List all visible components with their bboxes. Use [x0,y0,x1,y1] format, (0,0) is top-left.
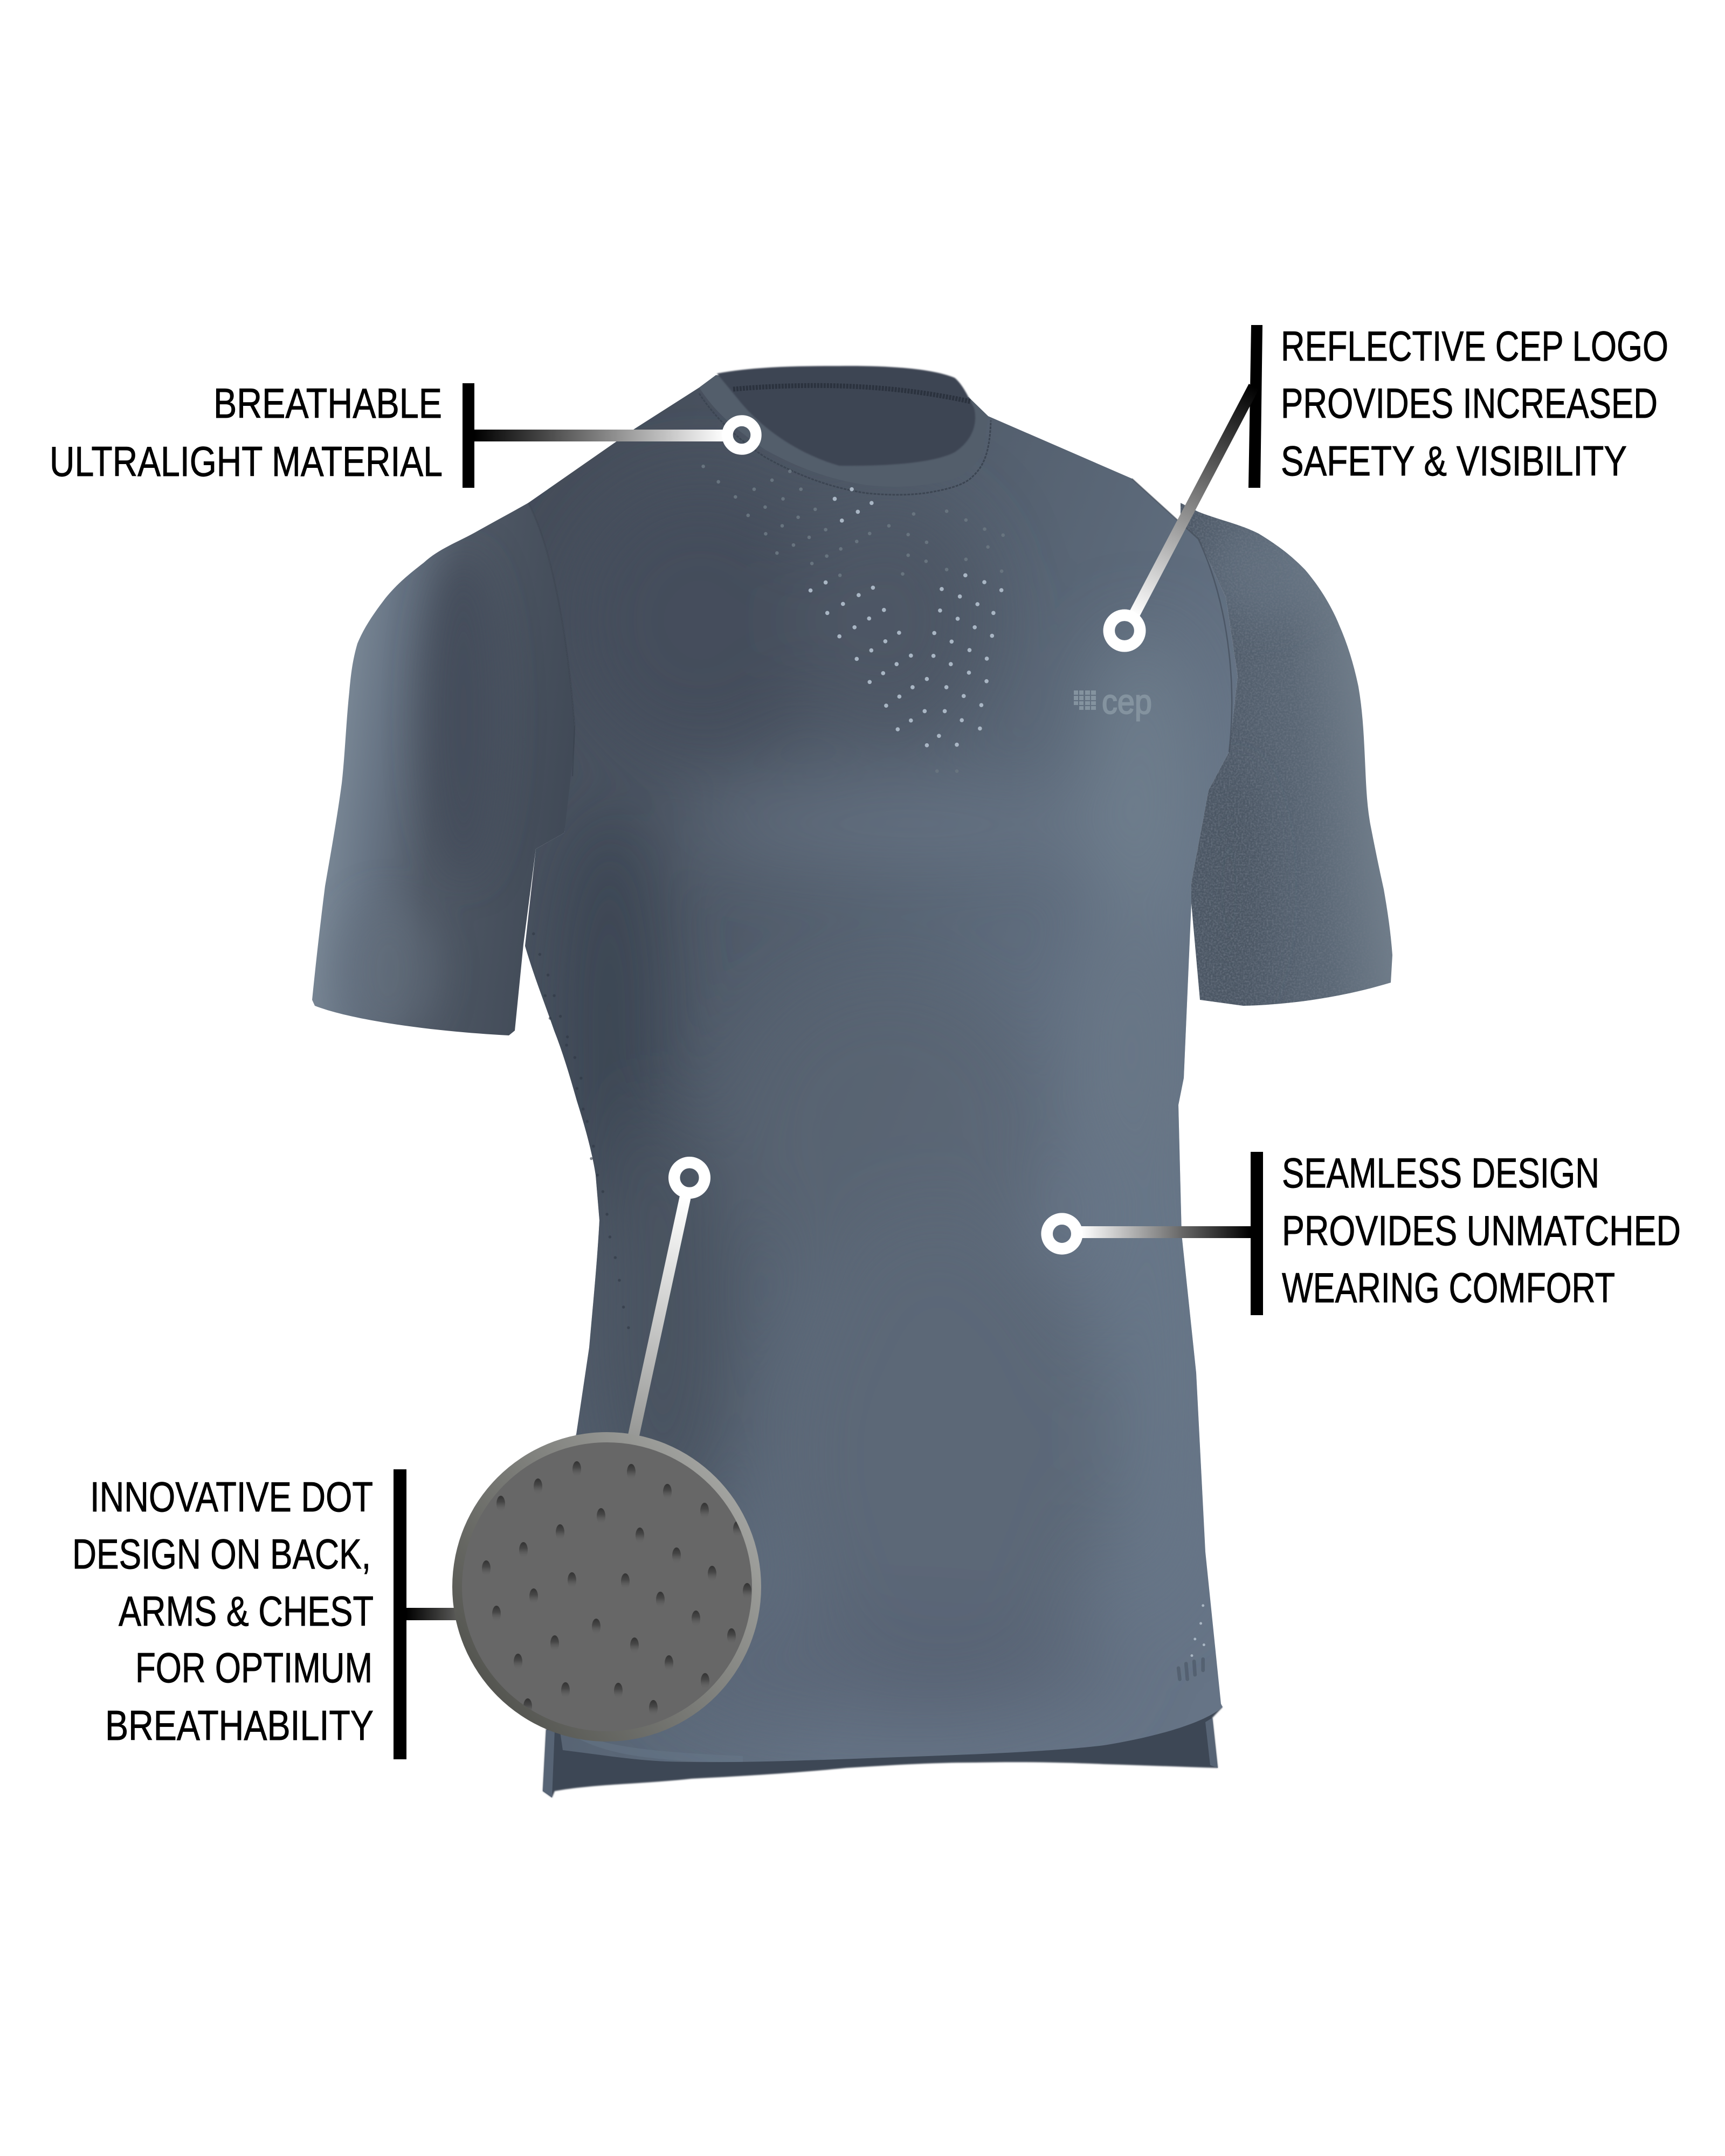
logo grid mark [1074,690,1096,710]
fabric perforations [482,1461,751,1716]
magnifier rim [452,1432,761,1742]
back hem side edge [543,1718,1218,1798]
raglan seam [528,479,1232,776]
callout: breathable ultralight material [50,379,756,488]
callout: seamless design [1047,1149,1681,1315]
collar band [699,375,988,487]
sleeve fabric grain [1181,503,1354,1006]
callout text: WEARING COMFORT [1282,1264,1615,1311]
collar stitching [699,393,991,495]
left sleeve [312,503,575,1035]
gradient connector [1081,1226,1251,1238]
inner collar seam [733,385,970,402]
callout: reflective cep logo [1109,322,1668,646]
back hem layer [543,1434,1223,1798]
infographic canvas [52,325,1680,1798]
callout text: SAFETY & VISIBILITY [1281,437,1627,485]
ring marker [1109,615,1140,646]
ring marker [728,420,756,450]
right sleeve [1181,503,1392,1006]
vertical bar [463,383,474,488]
gradient connector [1134,386,1254,616]
callout text [72,1473,374,1749]
side perforation dots [534,934,629,1328]
callout text: BREATHABLE [213,379,442,427]
cep logo [1074,682,1152,721]
callout text: FOR OPTIMUM [135,1644,372,1691]
neck opening [717,366,975,466]
callout text: INNOVATIVE DOT [90,1473,373,1521]
bright chest dots [703,466,1003,771]
magnifier fabric [462,1442,752,1731]
vertical bar [1248,325,1262,488]
gradient connector [474,430,728,441]
callout text [50,379,443,485]
vertical bar [1251,1152,1263,1315]
shirt body [525,375,1238,1763]
lower hem dots [1178,1606,1204,1680]
logo wordmark: cep [1102,682,1152,721]
callout text: DESIGN ON BACK, [72,1530,371,1578]
ring marker [674,1163,705,1193]
shirt illustration [302,350,1402,1806]
callout text: BREATHABILITY [105,1702,374,1749]
magnified fabric circle [452,1432,761,1742]
callout text [1282,1149,1681,1311]
callout text [1281,322,1668,485]
callout text: ULTRALIGHT MATERIAL [50,438,443,485]
vertical bar [394,1469,406,1759]
callout: innovative dot design [72,1163,761,1759]
callout text: ARMS & CHEST [119,1587,374,1635]
ring marker [1047,1219,1077,1249]
horizontal connector [406,1608,458,1620]
gradient connector to ring [633,1198,685,1436]
callout text: SEAMLESS DESIGN [1282,1149,1599,1197]
